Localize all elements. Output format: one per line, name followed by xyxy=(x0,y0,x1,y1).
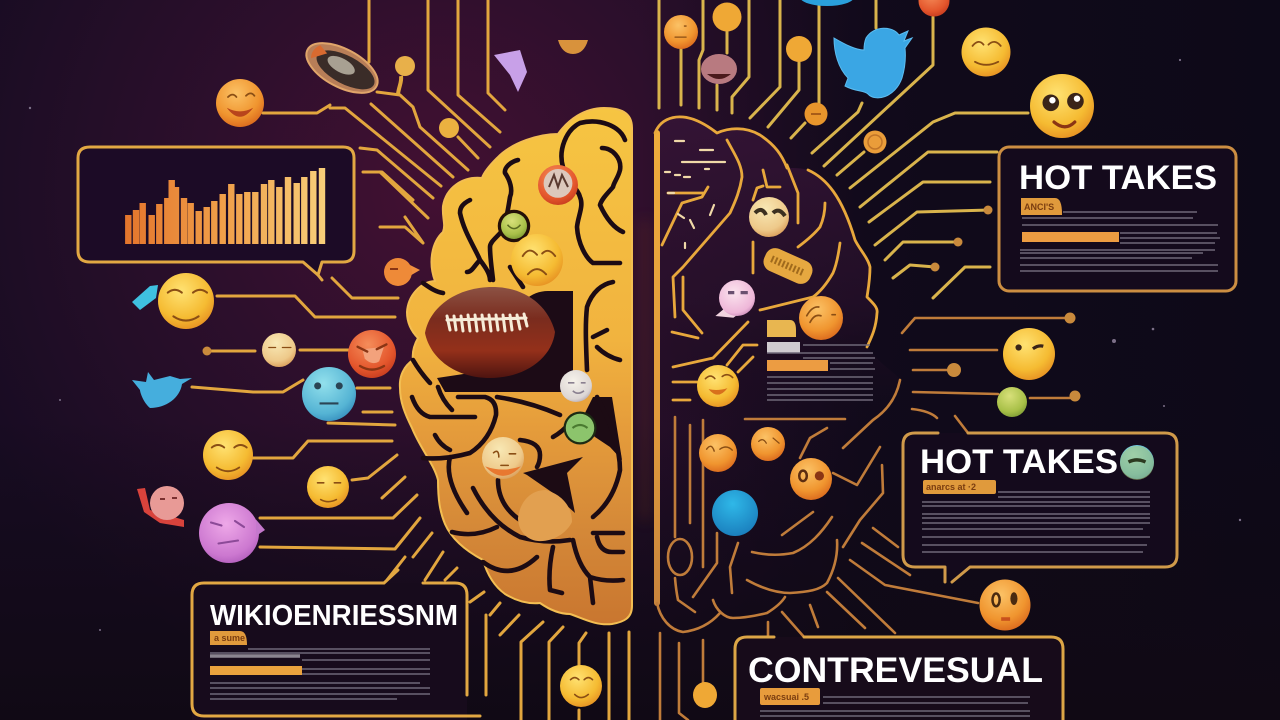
icon: twitter bird xyxy=(834,28,912,98)
tag xyxy=(760,688,820,705)
icon: emoji green lower brain xyxy=(564,412,596,444)
panel: hot takes lower right xyxy=(903,433,1177,582)
brain: left golden hemisphere xyxy=(400,108,632,624)
tag: a sume xyxy=(214,633,245,643)
tag: ANCI'S xyxy=(1024,202,1054,212)
icon: emoji yellow smile xyxy=(158,273,214,329)
heading: hot takes: HOT TAKES xyxy=(1019,159,1217,197)
icon: emoji surprised orange xyxy=(980,580,1030,630)
text lines xyxy=(210,649,430,699)
icon: emoji cream right brain xyxy=(749,197,789,237)
icon: emoji red badge in brain xyxy=(538,165,578,205)
icon: pink bird emoji xyxy=(137,486,184,527)
icon: emoji cream lower brain xyxy=(482,437,524,479)
text lines xyxy=(1020,212,1220,271)
icon: emoji bottom yellow xyxy=(560,665,602,707)
panel: bottom left title card xyxy=(192,570,480,720)
icon: emoji orange right brain C xyxy=(790,458,832,500)
circuit traces: left side xyxy=(192,0,629,720)
icon: emoji orange wink right brain xyxy=(799,296,843,340)
icon: emoji tan squint xyxy=(262,333,296,367)
icon: emoji yellow top right xyxy=(962,28,1010,76)
icon: emoji wink yellow xyxy=(1003,328,1055,380)
icon: small orange arrow emoji xyxy=(384,258,420,286)
tag: anarcs at ·2 xyxy=(926,482,976,492)
panel: bottom right title card xyxy=(735,637,1063,720)
tag xyxy=(1021,198,1062,215)
icon: gold node xyxy=(712,2,742,32)
icon: emoji orange grin top left xyxy=(216,79,264,127)
icon: emoji yellow small xyxy=(307,466,349,508)
icon: gold pin xyxy=(395,56,415,94)
icon: football xyxy=(425,287,555,378)
icon: emoji green ball xyxy=(997,387,1027,417)
icon: gold comb pill xyxy=(760,245,816,287)
icon: pin terminals xyxy=(202,206,1080,402)
heading: hot takes: HOT TAKES xyxy=(920,443,1118,481)
tag xyxy=(210,631,247,645)
chart: orange bars xyxy=(128,168,322,244)
icon: emoji yellow smile lower xyxy=(203,430,253,480)
heading: contrevesual: CONTREVESUAL xyxy=(748,651,1043,690)
icon: emoji big eyes yellow xyxy=(1030,74,1094,138)
text lines xyxy=(922,492,1150,552)
panel: mini document in brain xyxy=(767,320,875,400)
orange bar xyxy=(210,666,302,675)
icon: emoji orange right brain B xyxy=(751,427,785,461)
icon: emoji yellow right brain xyxy=(697,365,739,407)
circuit traces: right side xyxy=(659,0,1070,720)
icon: blue cap top xyxy=(800,0,854,6)
icon: teal emoji xyxy=(1120,445,1154,480)
icon: emoji green in brain xyxy=(498,210,530,242)
icon: emoji blue neutral xyxy=(302,367,356,421)
icon: emoji red laugh xyxy=(348,330,396,378)
tag: wacsuai .5 xyxy=(763,692,809,702)
icon: emoji orange right brain A xyxy=(699,434,737,472)
heading: garbled title: WIKIOENRIESSNM xyxy=(210,600,458,632)
icon: emoji white in brain xyxy=(560,370,592,402)
icon: blue ball xyxy=(712,490,758,536)
panel: hot takes top right xyxy=(999,147,1236,291)
icon: orange ring node xyxy=(864,130,886,154)
icon: orange emoji top edge xyxy=(918,0,950,16)
icon: emoji orange top A xyxy=(664,15,698,49)
icon: orange node xyxy=(804,102,828,126)
icon: blue bird left xyxy=(132,372,192,408)
text lines xyxy=(760,697,1030,716)
tag xyxy=(923,480,996,494)
icon: gold bowl xyxy=(558,40,588,54)
orange bar xyxy=(1022,232,1119,242)
icon: gold node right xyxy=(786,36,812,62)
icon: emoji sad yellow in brain xyxy=(511,234,563,286)
icon: gold node bottom xyxy=(693,682,717,708)
icon: emoji purple neutral xyxy=(199,503,265,563)
icon: emoji pink right brain xyxy=(715,280,755,318)
brain: right circuit hemisphere xyxy=(655,117,900,632)
icon: gold circle node xyxy=(439,118,459,138)
icon: emoji small blue bird left xyxy=(132,285,158,310)
icon: seed pod xyxy=(299,33,385,103)
icon: pink flat mouth emoji xyxy=(701,54,737,84)
icon: purple ribbon xyxy=(494,50,527,92)
panel: bar chart callout xyxy=(78,147,354,280)
